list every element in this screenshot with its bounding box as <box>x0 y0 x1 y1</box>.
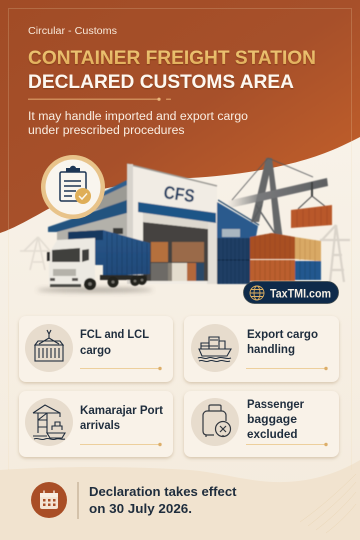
card: Export cargo handling <box>184 316 339 382</box>
footer band background <box>0 460 360 540</box>
clipboard <box>60 172 86 201</box>
card: Kamarajar Port arrivals: arrivals <box>80 420 120 432</box>
card: Passenger baggage excluded: baggage <box>247 414 297 426</box>
footer: effective date: on 30 July 2026. <box>89 501 192 516</box>
card: Export cargo handling: handling <box>247 344 295 356</box>
card: FCL and LCL cargo <box>19 316 173 382</box>
card: Passenger baggage excluded: excluded <box>247 429 298 441</box>
main warehouse facade <box>127 164 217 284</box>
delivery truck <box>47 230 150 290</box>
gantry crane <box>227 158 328 240</box>
ground shadow <box>37 288 153 292</box>
card: FCL and LCL cargo: FCL and LCL <box>80 329 149 341</box>
container stacks <box>217 233 321 284</box>
subtitle: It may handle imported and export cargo <box>28 111 248 123</box>
hanging orange container <box>291 205 332 228</box>
check mark seal <box>75 188 91 204</box>
card: Passenger baggage excluded <box>184 391 339 457</box>
site name: TaxTMI.com <box>270 286 331 300</box>
title line 2: DECLARED CUSTOMS AREA <box>28 71 294 93</box>
truck cab <box>49 238 95 285</box>
card: FCL and LCL cargo: cargo <box>80 345 111 357</box>
faint background crane right <box>320 225 350 282</box>
title line 1: CONTAINER FREIGHT STATION <box>28 47 316 69</box>
blue door canopy <box>138 202 216 223</box>
faint background crane left <box>20 237 50 270</box>
footer: effective date <box>31 482 237 519</box>
title divider with dots <box>28 98 171 101</box>
TaxTMI badge <box>244 282 338 304</box>
illustration: CFS warehouse scene <box>20 158 350 292</box>
declaration text: Declaration takes effect <box>89 484 237 499</box>
icon: cargo ship <box>198 337 231 362</box>
header text block: under prescribed procedures <box>28 125 185 137</box>
right blue shed <box>217 202 258 242</box>
eyebrow label: Circular - Customs <box>28 26 117 37</box>
header panel: rust background with curved lower edge <box>0 0 360 233</box>
clipboard badge icon <box>41 155 105 219</box>
cargo inside door <box>151 242 204 281</box>
side annex of warehouse <box>48 180 127 250</box>
truck wheels <box>84 275 147 290</box>
icon: container on hook <box>35 330 63 361</box>
CFS sign: CFS <box>162 182 196 206</box>
icon: calendar <box>31 482 67 518</box>
card: Kamarajar Port arrivals <box>19 391 173 457</box>
globe icon <box>250 286 264 300</box>
header text block <box>28 26 316 137</box>
icon: baggage with cross <box>203 405 230 437</box>
card: Export cargo handling: Export cargo <box>247 329 318 341</box>
icon: port crane and ship <box>33 405 65 440</box>
card: Kamarajar Port arrivals: Kamarajar Port <box>80 405 163 417</box>
decorative footer wave lines <box>300 474 356 533</box>
card: Passenger baggage excluded: Passenger <box>247 399 305 411</box>
